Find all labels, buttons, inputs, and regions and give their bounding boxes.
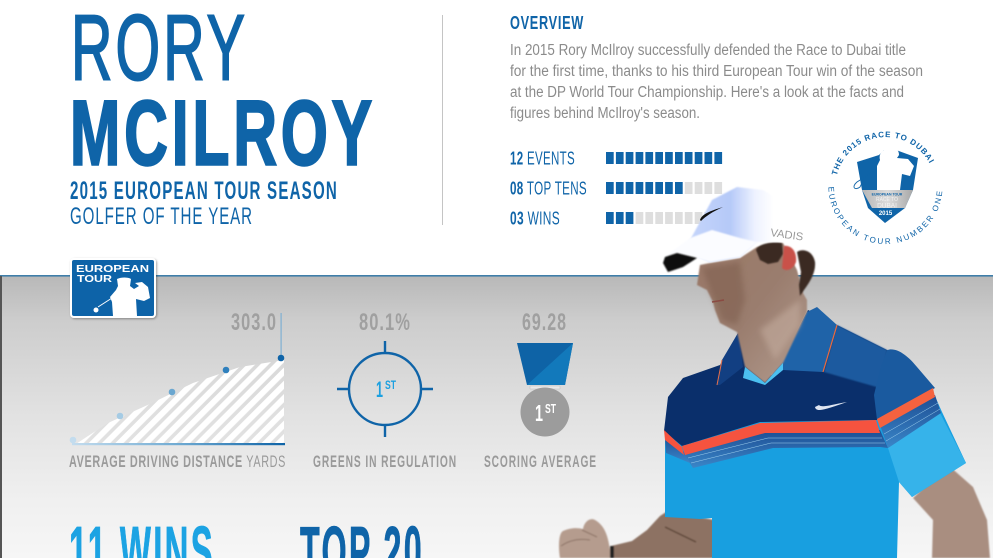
- overview text: at the DP World Tour Championship. Here's a look at the facts and: [510, 84, 904, 101]
- ear: [782, 246, 796, 270]
- overview text: figures behind McIlroy's season.: [510, 105, 700, 122]
- subtitle: [70, 177, 338, 230]
- cap crown: [680, 187, 805, 262]
- shirt stripes: [665, 395, 941, 468]
- badge: 2015 Race to Dubai: EUROPEAN TOUR NUMBER ONE: [828, 187, 942, 244]
- chart: scoring average medal: SCORING AVERAGE: [484, 452, 597, 471]
- shoulder highlight: [824, 325, 887, 388]
- lips: [712, 300, 724, 302]
- neck highlight: [760, 300, 800, 360]
- stat: 08 top tens: 08 TOP TENS: [510, 178, 587, 198]
- overview text: In 2015 Rory McIlroy successfully defended the Race to Dubai title: [510, 42, 906, 59]
- title: Rory McIlroy: [70, 0, 376, 184]
- logo: European Tour: EUROPEAN: [76, 264, 149, 275]
- shirt logo swoosh: [815, 402, 847, 410]
- chart: greens in regulation: 80.1%: [359, 309, 411, 336]
- subtitle: GOLFER OF THE YEAR: [70, 203, 253, 230]
- chart: greens in regulation: ST: [385, 378, 396, 392]
- hair: [756, 242, 815, 296]
- stat: 08 top tens: [510, 178, 722, 198]
- overview text: for the first time, thanks to his third European Tour win of the season: [510, 63, 923, 80]
- overview text: [510, 42, 923, 122]
- photo: golfer: [558, 186, 991, 558]
- right arm: [913, 465, 990, 558]
- shirt navy yoke: [664, 310, 887, 446]
- badge: 2015 Race to Dubai: DUBAI: [877, 202, 897, 210]
- stat: 12 events: [510, 148, 722, 168]
- placket: [743, 363, 783, 385]
- shirt base: [665, 380, 966, 558]
- face shading: [702, 262, 745, 325]
- chart: greens in regulation: 1: [376, 377, 383, 402]
- badge: 2015 Race to Dubai: [828, 132, 942, 244]
- chart: scoring average medal: [484, 309, 597, 471]
- neck and face: [697, 243, 807, 383]
- overview heading: OVERVIEW: [510, 12, 584, 33]
- left collar: [717, 333, 743, 385]
- chart: greens in regulation: GREENS IN REGULATION: [313, 452, 457, 471]
- chart: scoring average medal: ST: [545, 402, 556, 416]
- badge: 2015 Race to Dubai: THE 2015 RACE TO DUBAI: [832, 132, 934, 174]
- grey gradient background: [0, 276, 993, 558]
- badge: 2015 Race to Dubai: 2015: [879, 211, 893, 217]
- right collar: [765, 307, 837, 385]
- cap underside: [663, 253, 697, 272]
- white header background: [0, 0, 993, 276]
- title: Rory McIlroy: MCILROY: [70, 82, 376, 184]
- badge: 2015 Race to Dubai: EUROPEAN TOUR: [872, 192, 903, 196]
- arm and fist: [559, 512, 715, 558]
- chart: average driving distance: AVERAGE DRIVING DISTANCE YARDS: [69, 452, 286, 471]
- sleeve: [874, 349, 935, 420]
- cap brim: [663, 230, 757, 262]
- orange stripe: [682, 420, 880, 455]
- chart: average driving distance: 303.0: [231, 309, 277, 336]
- logo: European Tour: TOUR: [77, 274, 112, 285]
- logo: European Tour: [71, 259, 155, 317]
- chart: scoring average medal: 69.28: [522, 309, 567, 336]
- badge: 2015 Race to Dubai: RACE TO: [876, 197, 898, 203]
- stat: 03 wins: [510, 208, 722, 228]
- chart: scoring average medal: 1: [535, 400, 543, 426]
- stat: 03 wins: 03 WINS: [510, 208, 560, 228]
- chart: average driving distance: [69, 309, 286, 471]
- subtitle: 2015 EUROPEAN TOUR SEASON: [70, 177, 338, 205]
- stat: 12 events: 12 EVENTS: [510, 148, 575, 168]
- cap swoosh: [700, 207, 723, 221]
- chart: greens in regulation: [313, 309, 457, 471]
- cap logo: VADIS: [770, 227, 804, 244]
